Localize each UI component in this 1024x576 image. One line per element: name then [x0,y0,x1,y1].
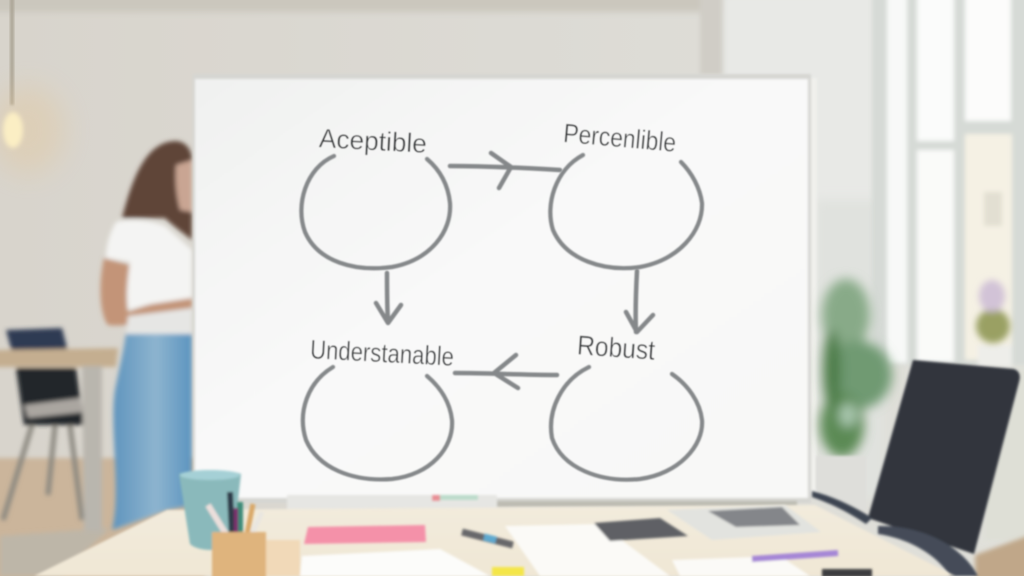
arrow: Robust to Understanable [455,355,557,388]
dark object [822,569,872,576]
circle: Robust [551,367,702,480]
window [872,0,1024,367]
plant [820,279,892,457]
window plant [976,280,1010,343]
office chair [812,360,1020,576]
tablet [667,505,821,540]
arm [101,258,192,325]
label: Understanable: Understanable [309,334,455,372]
papers [505,524,670,576]
arrow: Aceptible to Percenlible [450,153,560,188]
plant pot [816,456,866,512]
purple pen [752,553,838,559]
face [176,160,192,212]
arrow: Aceptible to Understanable [376,273,401,323]
label: Percenlible: Percenlible [562,118,677,158]
shirt [106,220,192,310]
dark notebook [594,518,688,541]
mug [179,470,241,550]
marker [462,532,513,545]
circle: Aceptible [301,156,450,268]
hair [122,141,192,240]
desk [34,505,955,576]
desk items [179,470,872,576]
marker tray [287,495,797,512]
pencil holder [208,492,266,576]
person [101,141,192,530]
yellow note [492,567,524,576]
circle: Understanable [303,367,452,479]
label: Aceptible: Aceptible [318,123,428,159]
jeans [112,332,192,530]
back table and chair [0,328,118,532]
arrow: Percenlible to Robust [626,271,653,332]
whiteboard [193,74,817,512]
circle: Percenlible [550,155,702,268]
peach desk shading [266,540,300,576]
label: Robust: Robust [576,329,656,366]
pendant light [0,0,64,174]
pink note [304,525,426,544]
